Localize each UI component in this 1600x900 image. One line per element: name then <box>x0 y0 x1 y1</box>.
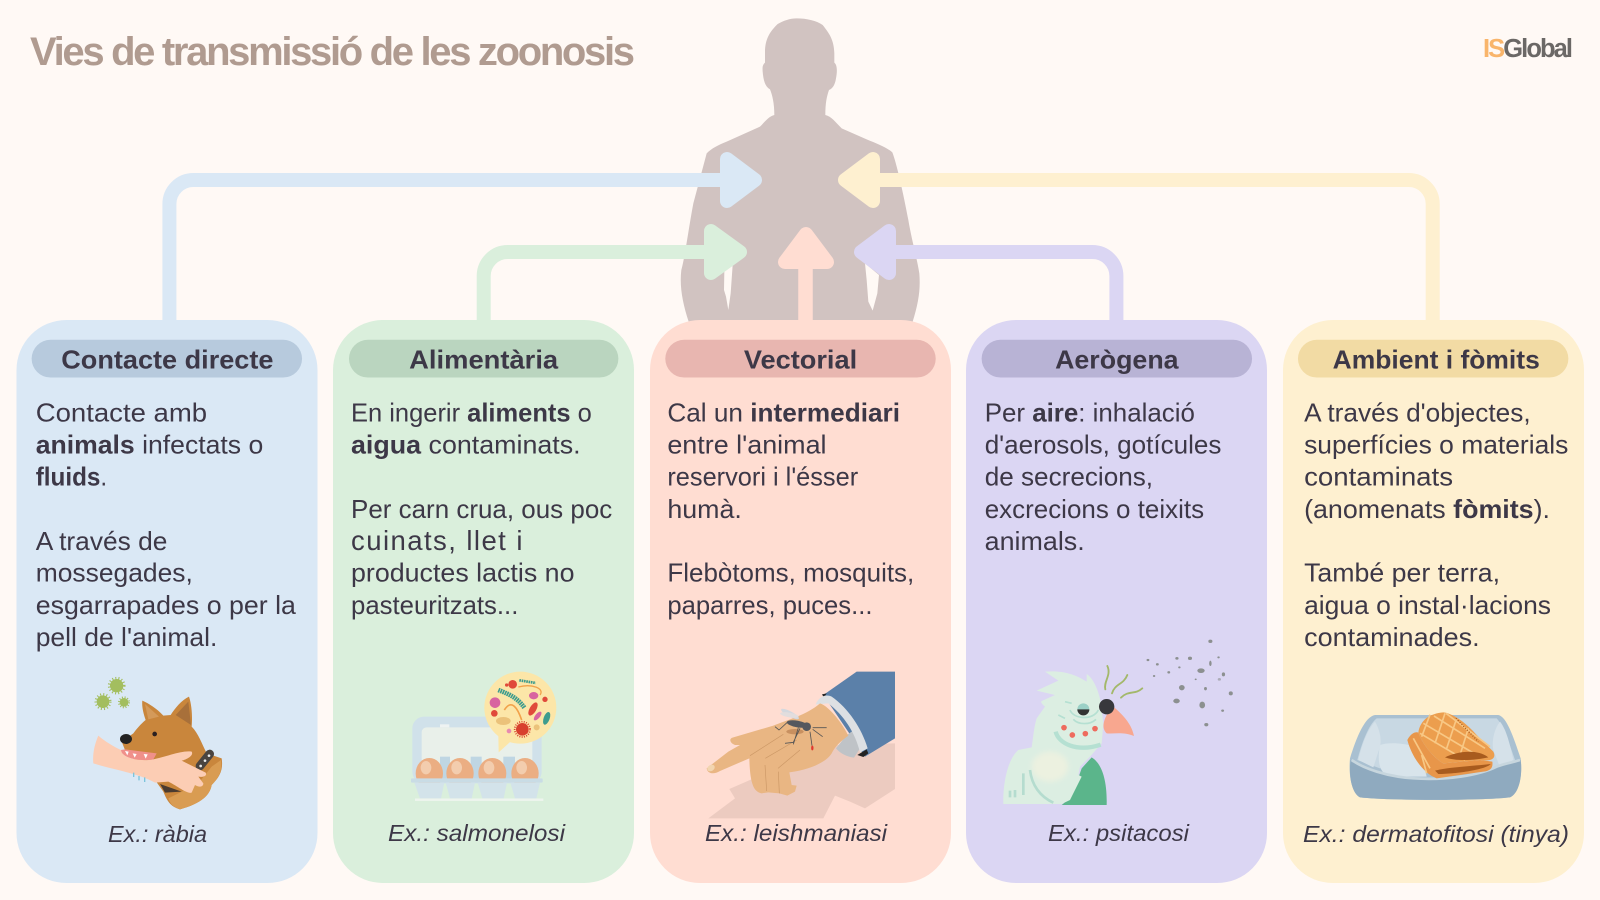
text: vectorial: humà. <box>667 494 742 524</box>
text: alimentària: aigua contaminats. <box>351 430 581 460</box>
text: contacte directe: pell de l'animal. <box>36 622 217 652</box>
heading pill: vectorial <box>665 340 936 378</box>
text: vectorial: Flebòtoms, mosquits, <box>667 558 914 588</box>
text: vectorial: Cal un intermediari <box>667 397 900 427</box>
panel: alimentària <box>333 320 634 883</box>
logo: ISGlobal: ISGlobal <box>1483 35 1573 63</box>
text: alimentària <box>351 397 612 620</box>
text: ambient i fòmits: A través d'objectes, <box>1304 397 1531 427</box>
text: alimentària: pasteuritzats... <box>351 590 518 620</box>
text: vectorial: entre l'animal <box>667 430 827 460</box>
heading pill: vectorial: Vectorial <box>744 344 857 374</box>
example: salmonelosi: Ex.: salmonelosi <box>388 820 566 846</box>
text: contacte directe: A través de <box>36 526 167 556</box>
heading pill: alimentària <box>349 340 618 378</box>
heading pill: aerògena: Aerògena <box>1055 344 1179 374</box>
text: vectorial <box>667 397 914 620</box>
icon: airborne particles <box>1147 640 1233 726</box>
text: contacte directe: animals infectats o <box>36 430 263 460</box>
icon: dog biting a hand <box>93 678 222 809</box>
heading pill: contacte directe: Contacte directe <box>61 344 273 374</box>
text: ambient i fòmits <box>1304 397 1568 652</box>
text: ambient i fòmits: També per terra, <box>1304 558 1500 588</box>
icon: egg carton with germs bubble <box>411 672 556 800</box>
text: ambient i fòmits: aigua o instal·lacions <box>1304 590 1551 620</box>
heading pill: ambient i fòmits <box>1298 340 1568 378</box>
text: ambient i fòmits: contaminats <box>1304 462 1453 492</box>
panel: contacte directe <box>16 320 318 883</box>
text: aerògena: d'aerosols, gotícules <box>985 430 1221 460</box>
arrow: alimentària to human <box>484 231 740 322</box>
heading pill: ambient i fòmits: Ambient i fòmits <box>1333 344 1540 374</box>
title: Vies de transmissió de les zoonosis <box>30 30 635 74</box>
text: contacte directe: mossegades, <box>36 558 193 588</box>
text: ambient i fòmits: contaminades. <box>1304 622 1480 652</box>
text: ambient i fòmits: superfícies o materials <box>1304 430 1568 460</box>
panel: ambient i fòmits <box>1283 320 1584 883</box>
icon: pet bed with blanket <box>1350 712 1521 800</box>
example: leishmaniasi: Ex.: leishmaniasi <box>705 820 888 846</box>
heading pill: contacte directe <box>32 340 302 378</box>
panel: aerògena <box>966 320 1267 883</box>
example: psitacosi: Ex.: psitacosi <box>1048 820 1190 846</box>
example: dermatofitosi (tinya): Ex.: dermatofitosi (tinya) <box>1303 821 1569 847</box>
example: ràbia: Ex.: ràbia <box>108 821 207 847</box>
text: contacte directe: Contacte amb <box>36 397 207 427</box>
text: contacte directe: fluids. <box>36 462 107 492</box>
arrow: aerògena to human <box>861 231 1116 322</box>
panel: vectorial <box>650 320 951 883</box>
text: alimentària: En ingerir aliments o <box>351 397 592 427</box>
arrow: vectorial to human <box>785 234 827 322</box>
text: contacte directe <box>36 397 296 652</box>
icon: mosquito on a hand <box>706 672 895 818</box>
text: aerògena: Per aire: inhalació <box>985 397 1195 427</box>
text: aerògena: de secrecions, <box>985 462 1153 492</box>
text: alimentària: cuinats, llet i <box>351 525 522 556</box>
heading pill: aerògena <box>982 340 1252 378</box>
icon: sneezing parrot <box>1003 666 1142 805</box>
heading pill: alimentària: Alimentària <box>409 344 559 374</box>
text: aerògena: excrecions o teixits <box>985 494 1204 524</box>
text: contacte directe: esgarrapades o per la <box>36 590 296 620</box>
text: vectorial: paparres, puces... <box>667 590 872 620</box>
arrow: ambient i fòmits to human <box>845 159 1433 322</box>
text: alimentària: Per carn crua, ous poc <box>351 494 612 524</box>
human silhouette <box>681 18 920 322</box>
text: vectorial: reservori i l'ésser <box>667 462 858 492</box>
text: alimentària: productes lactis no <box>351 558 574 588</box>
text: aerògena: animals. <box>985 526 1085 556</box>
text: ambient i fòmits: (anomenats fòmits). <box>1304 494 1550 524</box>
text: aerògena <box>985 397 1221 556</box>
arrow: contacte directe to human <box>169 159 755 322</box>
